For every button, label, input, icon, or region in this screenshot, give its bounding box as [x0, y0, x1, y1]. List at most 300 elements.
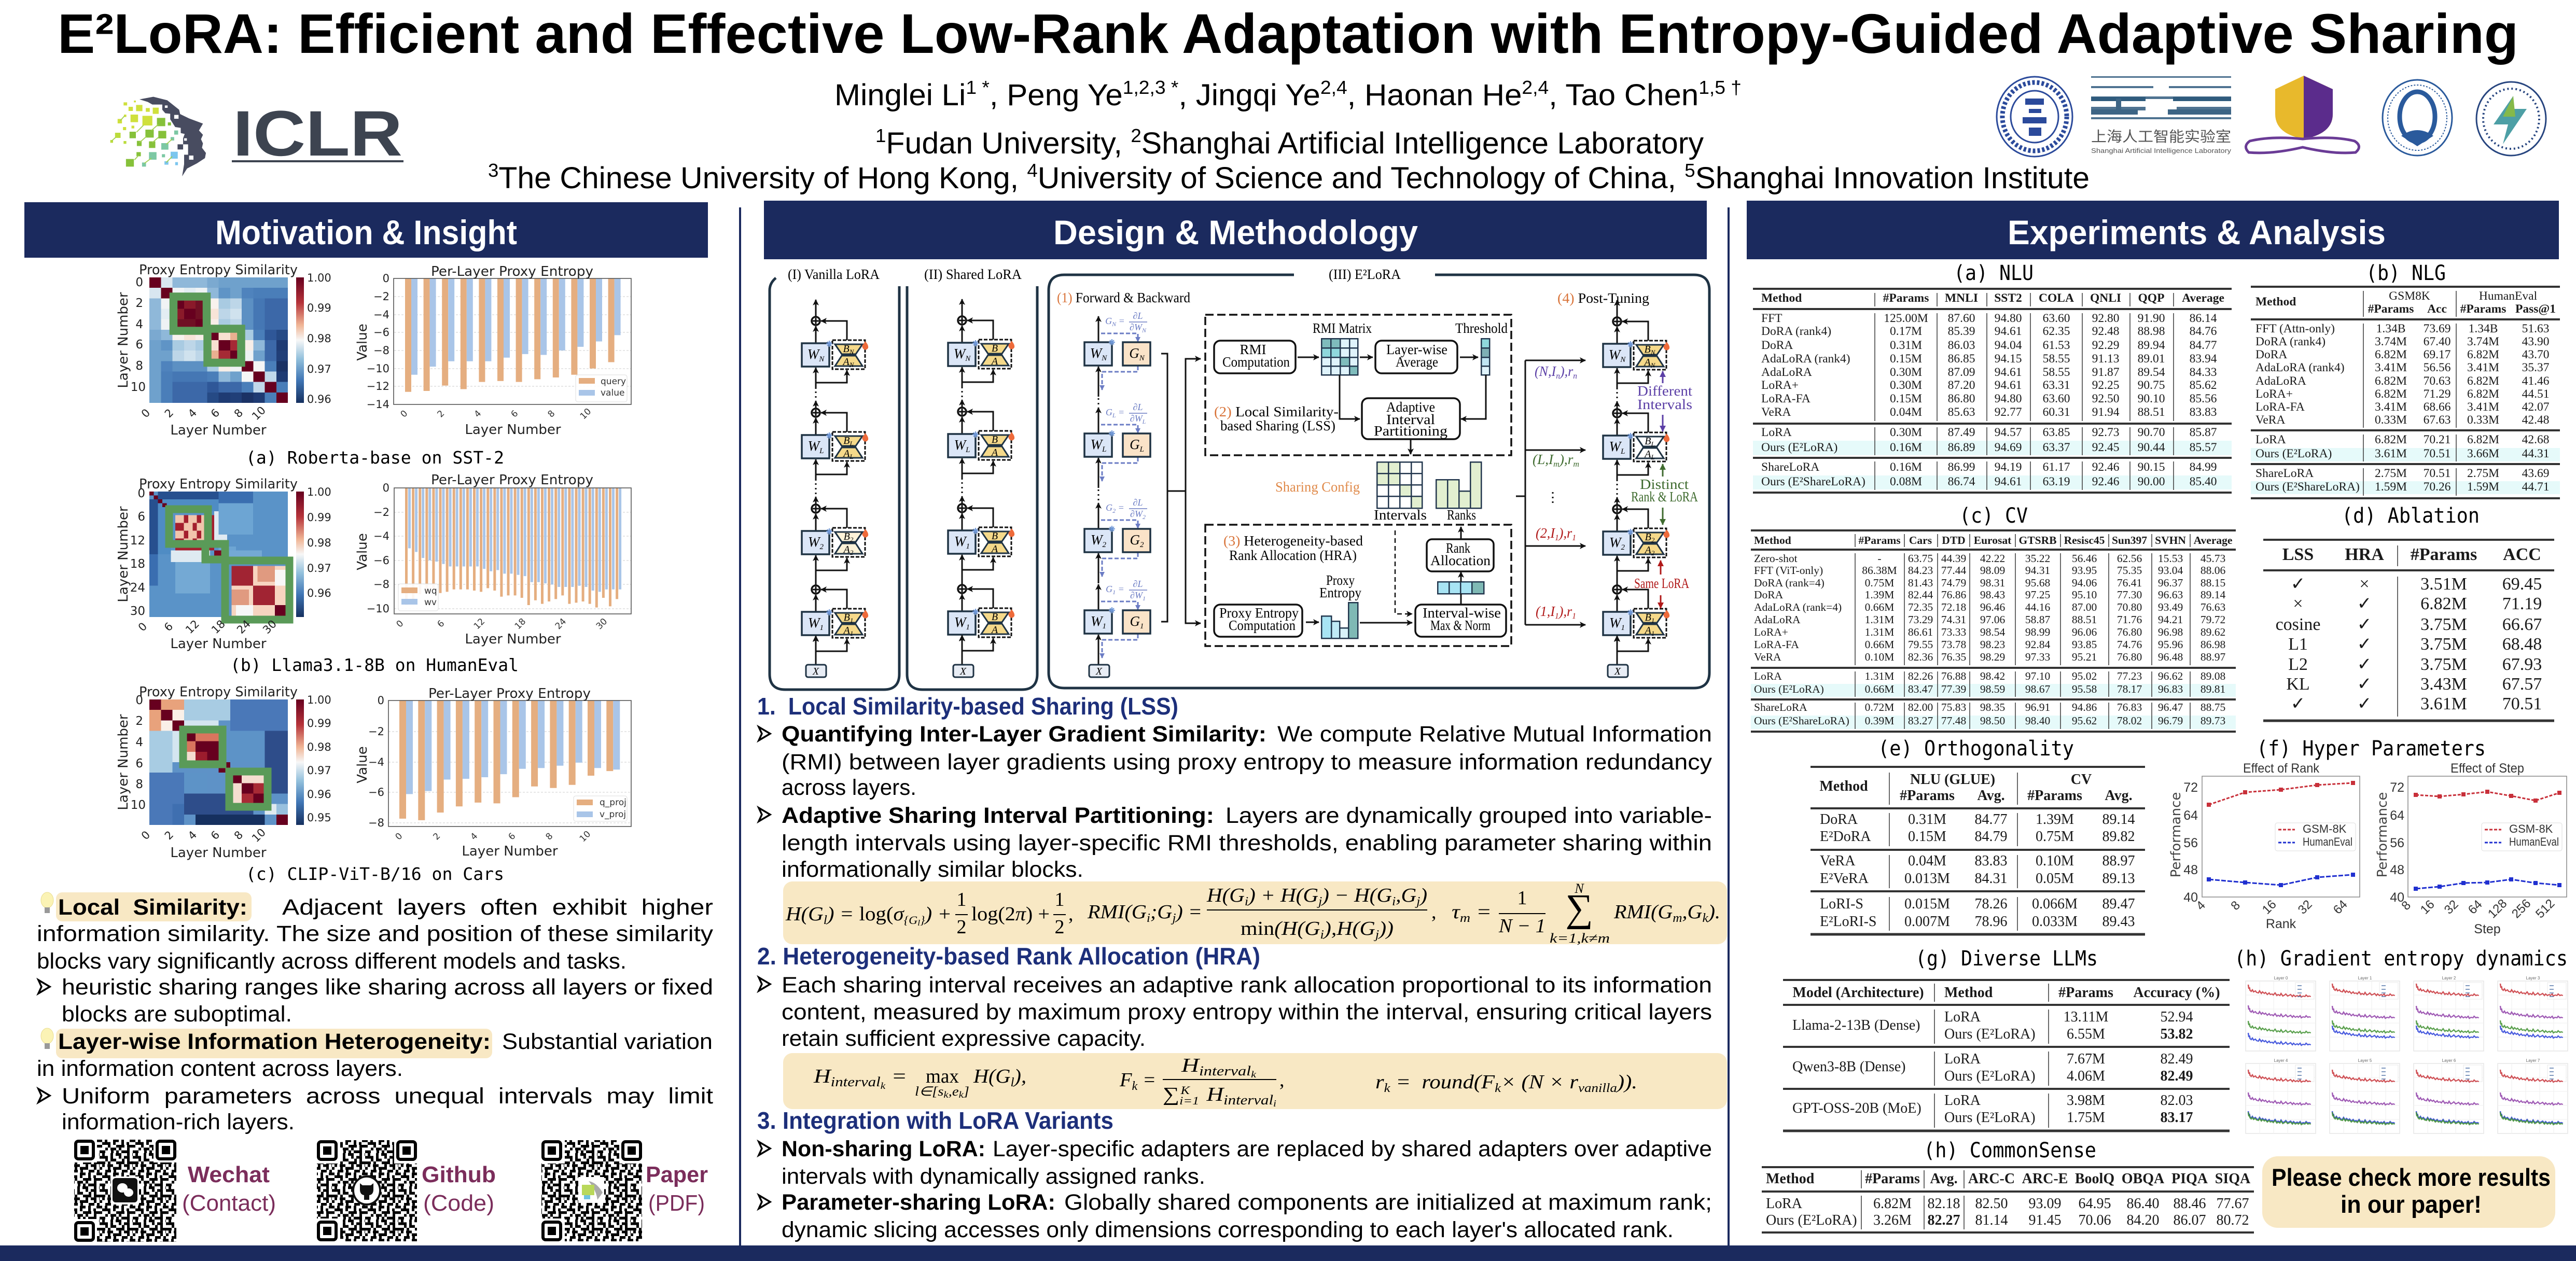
table: CV: 97.10 [2025, 670, 2050, 682]
diagram: Vanilla LoRA: 2 [850, 536, 854, 543]
heading bar: Experiments [1747, 201, 2559, 259]
table: CV: DoRA (rank=4) [1754, 577, 1825, 589]
table: NLU: 58.55 [2043, 366, 2070, 379]
forward and backward column: ∂L [1133, 497, 1143, 508]
table: Ablation: L2 [2288, 655, 2308, 674]
heatmap c labels: 6 [208, 829, 222, 842]
table: Orthogonality: E²LoRI-S [1820, 914, 1876, 930]
formula box: entropy and RMI: ) = [826, 903, 859, 925]
step 4 label: (4) Post-Tuning [1557, 290, 1649, 306]
formula box: rank allocation: l∈[s [915, 1085, 940, 1099]
table: Diverse LLMs: 82.03 [2161, 1092, 2193, 1109]
HRA module: Computation [1229, 618, 1296, 633]
table: NLG: 3.41M [2467, 400, 2499, 414]
small multiples: gradient entropy: Layer 4 [2274, 1058, 2288, 1063]
table: CV: 44.16 [2025, 601, 2050, 613]
table: NLU: 92.46 [2092, 460, 2120, 474]
formula box: entropy and RMI: , [1431, 901, 1437, 923]
table: Diverse LLMs: 82.49 [2161, 1051, 2193, 1067]
text block: LSS bullets: across layers. [782, 775, 916, 800]
table: Ablation: 71.19 [2502, 594, 2542, 613]
bar chart a: query [601, 376, 626, 387]
heatmap c labels: 10 [249, 826, 268, 845]
table: Ablation: ✓ [2357, 655, 2372, 674]
heatmap b labels: Proxy Entropy Similarity [139, 477, 298, 492]
formula box: entropy and RMI: k [1702, 912, 1708, 925]
table: CV: 98.67 [2025, 683, 2050, 695]
text block: LSS bullets: length intervals using layer-specific RMI thresholds, enabling parameter sharing within [782, 831, 1712, 856]
HRA module [1205, 525, 1511, 646]
table: Orthogonality: #Params [2027, 788, 2082, 804]
text block: HRA: Each sharing interval receives an adaptive rank allocation proportional to its information [782, 973, 1712, 998]
config output arrows: m [1553, 460, 1559, 469]
table: CV: 44.39 [1941, 552, 1966, 565]
table: NLU: 86.99 [1948, 460, 1975, 474]
formula box: entropy and RMI: m [1673, 912, 1682, 925]
table: NLU: 90.70 [2138, 426, 2165, 439]
QR label: Github [422, 1162, 496, 1216]
table: NLG: Acc [2427, 302, 2447, 316]
table: NLG: 71.29 [2424, 387, 2450, 401]
table: NLG: 3.61M [2375, 447, 2407, 460]
annotation: distinct rank and LoRA: Rank & LoRA [1631, 489, 1698, 505]
formula box: rank allocation: l [1010, 1076, 1014, 1089]
table: NLG: DoRA (rank4) [2255, 335, 2326, 348]
text block: layer-wise heterogeneity: Uniform parameters across unequal intervals may limit [62, 1084, 713, 1109]
bar chart a: −12 [367, 380, 389, 393]
table: Orthogonality: 78.96 [1975, 914, 2007, 930]
table: NLG: 35.37 [2522, 361, 2550, 374]
formula box: entropy and RMI: )) [1378, 918, 1394, 940]
table: NLG: HumanEval [2479, 289, 2538, 303]
table: NLU: 84.33 [2190, 366, 2217, 379]
config output arrows: (L,I [1533, 452, 1553, 467]
formula box: entropy and RMI: ) + [924, 903, 952, 925]
post-tuning column: 1 [1651, 629, 1654, 637]
table: CommonSense: 82.27 [1927, 1212, 1960, 1228]
table: NLG: 44.51 [2522, 387, 2549, 401]
formula box: rank allocation: = [885, 1066, 907, 1087]
table: CommonSense: 88.46 [2173, 1196, 2206, 1212]
table: CV: 88.51 [2072, 613, 2097, 626]
text block: integration: intervals with dynamically assigned ranks. [782, 1164, 1205, 1189]
heatmap c labels: 2 [135, 714, 143, 728]
formula box: rank allocation: ), [1013, 1066, 1026, 1087]
formula box: rank allocation: H [814, 1066, 828, 1087]
heatmap a labels: 2 [135, 297, 143, 310]
table: CV: 79.72 [2201, 613, 2225, 626]
diagram: Shared LoRA: N [965, 355, 971, 363]
diagram: Vanilla LoRA: W [808, 438, 819, 454]
table: Ablation: ✓ [2357, 635, 2372, 654]
table: CV: 93.04 [2158, 564, 2183, 577]
QR code: Paper [540, 1139, 644, 1243]
chart heading f: (f) Hyper Parameters [2257, 737, 2486, 761]
text block: integration: Non-sharing LoRA: [782, 1137, 985, 1161]
small multiples: gradient entropy: Layer 5 [2358, 1058, 2372, 1063]
table: Ablation: HRA [2345, 545, 2384, 564]
table: Ablation: 68.48 [2502, 635, 2542, 654]
text block: integration: Parameter-sharing LoRA: [782, 1190, 1055, 1215]
text block: layer-wise heterogeneity: Substantial variation [502, 1029, 713, 1054]
table: Ablation: KL [2286, 675, 2310, 694]
formula box: rank allocation: interval [831, 1074, 881, 1089]
heatmap c labels: 4 [135, 736, 143, 749]
table: Orthogonality: 84.77 [1975, 811, 2007, 828]
table: CV: FFT (ViT-only) [1754, 564, 1823, 577]
forward and backward column: 2 [1103, 541, 1107, 549]
diagram: Vanilla LoRA: L [849, 453, 854, 460]
table: NLU [1753, 289, 2232, 493]
post-tuning column: A [1645, 544, 1651, 556]
colorbar c: 0.97 [307, 764, 331, 777]
formula box: rank allocation: k [881, 1081, 886, 1091]
table: NLU: 92.46 [2092, 475, 2120, 488]
config output arrows: n [1573, 372, 1577, 381]
table: Orthogonality: 0.75M [2036, 829, 2074, 845]
table: NLU: Average [2182, 291, 2224, 305]
config output arrows: ),r [1558, 525, 1572, 541]
affiliations line 2: 5 [1684, 160, 1695, 181]
heatmap b labels: 12 [183, 618, 202, 636]
diagram: Shared LoRA: (II) Shared LoRA [924, 267, 1022, 282]
diagram: Shared LoRA: X [959, 666, 967, 677]
forward and backward column: ∂L [1133, 402, 1143, 412]
table: CommonSense: Ours (E²LoRA) [1766, 1212, 1857, 1228]
table: CV [1751, 530, 2236, 732]
bar chart a: 0 [383, 272, 389, 285]
forward and backward column: ∂W [1130, 590, 1143, 600]
QR label: Paper: (PDF) [648, 1190, 705, 1216]
table: Ablation: 3.51M [2420, 575, 2467, 594]
diagram: Shared LoRA: A [991, 624, 998, 636]
table: Ablation: 3.75M [2420, 635, 2467, 654]
table: CV: 0.75M [1865, 577, 1894, 589]
forward and backward column: ∂L [1133, 311, 1143, 321]
diagram: E2LoRA: (III) E²LoRA [1329, 267, 1401, 282]
heatmap a [149, 277, 288, 403]
heatmap c labels: Layer Number [170, 845, 267, 861]
table: NLG: 6.82M [2467, 348, 2499, 361]
table: NLU: 89.54 [2138, 366, 2165, 379]
table: CV: 74.79 [1941, 577, 1966, 589]
table: CV: - [1877, 552, 1882, 565]
table: NLU: 91.87 [2092, 366, 2120, 379]
table: NLG: 44.71 [2522, 480, 2549, 494]
table: NLU: 91.90 [2138, 312, 2165, 325]
line chart: effect of step: 32 [2442, 898, 2461, 917]
colorbar a: 0.99 [307, 302, 331, 314]
bar chart b: 0 [395, 619, 406, 629]
table: NLU: 125.00M [1884, 312, 1928, 325]
colorbar a: 0.97 [307, 363, 331, 375]
diagram: Vanilla LoRA: W [807, 346, 819, 362]
heading bar: Motivation [24, 202, 708, 258]
table: Orthogonality: 0.04M [1908, 853, 1946, 869]
table: NLU: 0.16M [1890, 441, 1922, 454]
heading bar: Design: Design & Methodology [1053, 213, 1418, 251]
table: CV: 96.37 [2158, 577, 2183, 589]
heatmap b labels: 24 [130, 581, 145, 595]
formula box: entropy and RMI: RMI(G [1088, 901, 1144, 923]
forward and backward column: G [1130, 532, 1140, 548]
forward and backward column: 1 [1140, 622, 1144, 630]
heatmap a labels: 8 [232, 407, 245, 420]
annotation: different intervals: Intervals [1637, 397, 1692, 412]
table: NLG: 6.82M [2467, 387, 2499, 401]
table: CV: 96.06 [2072, 626, 2097, 638]
post-tuning column: 2 [1651, 536, 1655, 544]
line chart: effect of rank: GSM-8K [2303, 822, 2347, 835]
post-tuning column: B [1645, 531, 1651, 543]
diagram: Vanilla LoRA: 2 [850, 549, 854, 556]
table: CommonSense: PIQA [2171, 1171, 2208, 1187]
forward and backward column: G [1130, 613, 1140, 629]
table: NLU: QNLI [2090, 291, 2121, 305]
config output arrows: ),r [1558, 604, 1572, 619]
table: CV: 86.98 [2201, 638, 2225, 651]
forward and backward column: G [1130, 437, 1140, 452]
formula box: entropy and RMI: log(2π) + [971, 903, 1050, 925]
table: NLG: Ours (E²ShareLoRA) [2255, 480, 2360, 494]
HRA module: Allocation [1430, 553, 1491, 568]
table: CV: GTSRB [2019, 534, 2056, 547]
table: NLG: DoRA [2255, 348, 2287, 361]
text block: layer-wise heterogeneity: in information content across layers. [37, 1056, 403, 1081]
table: CV: Eurosat [1974, 534, 2012, 547]
heatmap b [149, 492, 289, 620]
diagram: Shared LoRA: L [965, 446, 970, 454]
table: NLG: 3.41M [2375, 400, 2407, 414]
table: CV: 96.47 [2158, 701, 2183, 713]
heatmap a labels: Layer Number [170, 423, 267, 438]
table: NLG: LoRA [2255, 433, 2286, 446]
table: NLG: 2.75M [2375, 467, 2407, 480]
logo: Shanghai Innovation Institute [2476, 82, 2546, 156]
heatmap b labels: 6 [137, 510, 145, 524]
table: NLU: 61.53 [2043, 339, 2070, 352]
forward and backward column: ∂W [1130, 413, 1143, 424]
diagram: Vanilla LoRA: L [849, 440, 854, 447]
table: NLU: LoRA-FA [1761, 392, 1811, 405]
table: CV: DoRA [1754, 589, 1784, 601]
HRA module: (3) Heterogeneity-based [1223, 533, 1363, 549]
table: CV: 0.72M [1865, 701, 1894, 713]
diagram: Vanilla LoRA: A [844, 625, 850, 636]
table: NLU: 94.61 [1995, 325, 2022, 338]
formula box: entropy and RMI: H(G [1207, 885, 1242, 906]
text block: local similarity: information similarity. The size and position of these similarity [37, 921, 714, 946]
table: CommonSense: 84.20 [2126, 1212, 2160, 1228]
table: NLG: 67.63 [2424, 413, 2450, 427]
table: NLG: 68.66 [2424, 400, 2451, 414]
formula box: entropy and RMI: } [920, 914, 925, 927]
authors: , Tao Chen [1549, 78, 1698, 112]
bar chart b: Value [355, 533, 370, 570]
table: NLU: 89.01 [2138, 352, 2165, 366]
table: CV: 93.49 [2158, 601, 2183, 613]
forward and backward column: 1 [1103, 622, 1106, 630]
diagram: Vanilla LoRA: N [849, 361, 855, 369]
bar chart b: −4 [373, 530, 389, 542]
table heading commonsense: (h) CommonSense [1924, 1139, 2096, 1162]
table: Orthogonality: 0.013M [1904, 871, 1950, 887]
colorbar c: 0.98 [307, 741, 331, 753]
logo: USTC [2383, 80, 2452, 156]
colorbar b [296, 486, 331, 617]
table: CommonSense: 77.67 [2217, 1196, 2249, 1212]
heatmap a labels: 8 [135, 359, 143, 373]
line chart: effect of step: Effect of Step [2450, 761, 2524, 776]
table: NLU: 0.16M [1890, 460, 1922, 474]
bar chart c: Layer Number [462, 844, 558, 859]
formula box: rank allocation: × (N × r [1501, 1071, 1578, 1093]
table: CV: LoRA [1754, 670, 1782, 682]
line chart: effect of rank: 64 [2183, 808, 2198, 823]
table: NLG: Ours (E²LoRA) [2255, 447, 2332, 460]
table: NLG: 1.59M [2375, 480, 2407, 494]
table: NLU: 92.25 [2092, 379, 2119, 392]
forward and backward column: ∂L [1133, 579, 1143, 589]
forward and backward column: W [1091, 437, 1102, 452]
formula box: rank allocation: interval [1199, 1063, 1251, 1078]
heatmap b labels: 24 [234, 618, 253, 636]
table: NLU: 0.30M [1890, 426, 1922, 439]
heatmap c labels: Proxy Entropy Similarity [139, 684, 298, 700]
table: CV: AdaLoRA [1754, 613, 1801, 626]
LSS module: Average [1396, 354, 1438, 370]
diagram: Shared LoRA: W [954, 437, 966, 453]
authors: 2,4 [1320, 77, 1347, 98]
bar chart c: Per-Layer Proxy Entropy [428, 686, 591, 702]
caption b: (b) Llama3.1-8B on HumanEval [230, 655, 519, 675]
table: NLU: ShareLoRA [1761, 460, 1819, 474]
table: CV: 73.78 [1941, 638, 1966, 651]
table: CV: 72.35 [1908, 601, 1933, 613]
bar chart a: 0 [399, 409, 410, 419]
table: Ablation: ✓ [2291, 694, 2305, 713]
post-tuning column: W [1609, 347, 1620, 362]
formula box: entropy and RMI: = [1470, 901, 1492, 923]
logo: Shanghai AI Lab: Shanghai Artificial Intelligence Laboratory [2091, 147, 2232, 155]
table: CommonSense: Method [1766, 1171, 1815, 1187]
table: NLU: MNLI [1945, 291, 1978, 305]
heading bar: Experiments: Experiments & Analysis [2008, 213, 2386, 251]
small multiples: gradient entropy: Layer 1 [2358, 976, 2372, 980]
table: Diverse LLMs: 82.49 [2161, 1068, 2193, 1084]
sharing config: Intervals [1374, 507, 1427, 523]
table: CV: 95.21 [2072, 651, 2097, 663]
text block: local similarity: blocks vary significantly across different models and tasks. [37, 949, 626, 974]
colorbar b: 1.00 [307, 486, 331, 498]
bar chart b: 12 [472, 617, 487, 632]
table: CV: 1.39M [1865, 589, 1894, 601]
table: CV: 98.29 [1980, 651, 2005, 663]
bar chart b: −6 [373, 554, 389, 567]
table: NLG: LoRA+ [2255, 387, 2293, 401]
authors: 1,2,3 * [1123, 77, 1178, 98]
post-tuning column: N [1650, 348, 1656, 356]
table: CV: 96.98 [2158, 626, 2183, 638]
table: CV: 83.27 [1908, 714, 1933, 727]
diagram: Shared LoRA [907, 267, 1037, 690]
heatmap a labels: 0 [139, 407, 152, 420]
formula box: entropy and RMI: ) [1419, 885, 1427, 906]
table: NLG: 3.41M [2375, 361, 2407, 374]
table: CV: 98.40 [2025, 714, 2050, 727]
table: CV: Sun397 [2112, 534, 2147, 547]
table heading b: (b) NLG [2366, 261, 2446, 285]
config output arrows: 1 [1572, 534, 1576, 542]
config output arrows [1516, 360, 1585, 625]
diagram: Shared LoRA: 1 [966, 623, 970, 632]
table: CV: 56.46 [2072, 552, 2097, 565]
small multiples: gradient entropy: Layer 2 [2442, 976, 2456, 980]
config output arrows: (2,I [1536, 525, 1555, 541]
LSS module: (2) Local Similarity- [1214, 404, 1339, 419]
text block: layer-wise heterogeneity: Layer-wise Information Heterogeneity: [58, 1029, 491, 1054]
table: NLG: 6.82M [2375, 433, 2407, 446]
table: NLU: 85.63 [1948, 405, 1975, 419]
line chart: effect of rank: 40 [2183, 890, 2198, 905]
table: NLU: 91.94 [2092, 405, 2120, 419]
table: NLU: 94.80 [1995, 312, 2022, 325]
heading: integration: 3. Integration with LoRA Variants [757, 1107, 1113, 1134]
config output arrows: 1 [1555, 534, 1559, 542]
post-tuning column: W [1609, 535, 1621, 550]
HRA module: Rank [1446, 540, 1470, 556]
QR label: Paper: Paper [646, 1162, 708, 1187]
colorbar c: 1.00 [307, 694, 331, 706]
heatmap c labels: 6 [135, 757, 143, 770]
table: NLG: 3.41M [2467, 361, 2499, 374]
table: Diverse LLMs: Method [1944, 985, 1993, 1001]
table: CommonSense: Avg. [1930, 1171, 1958, 1187]
table: CommonSense [1762, 1167, 2254, 1232]
forward and backward column: G [1106, 407, 1112, 417]
table: Orthogonality: DoRA [1820, 811, 1858, 828]
forward and backward column: W [1091, 532, 1103, 548]
table: NLG: 56.56 [2424, 361, 2451, 374]
formula box: entropy and RMI: ;G [1150, 901, 1172, 923]
table: CV: 77.30 [2117, 589, 2142, 601]
table: CV: 96.46 [1980, 601, 2005, 613]
formula box: entropy and RMI: ) = [1175, 901, 1202, 923]
heatmap b labels [116, 477, 298, 652]
table: CV: LoRA-FA [1754, 638, 1799, 651]
table: NLU: 63.37 [2043, 441, 2070, 454]
diagram: Shared LoRA: W [954, 614, 966, 630]
panel: Experiments and Analysis [1747, 201, 2568, 1232]
table: CommonSense: BoolQ [2075, 1171, 2114, 1187]
table: CV: 76.63 [2201, 601, 2225, 613]
text block: LSS bullets: (RMI) between layer gradients using proxy entropy to measure information redundancy [782, 750, 1712, 775]
table: CV: 83.47 [1908, 683, 1933, 695]
heatmap b labels: 0 [137, 487, 145, 500]
heatmap b labels: 18 [209, 618, 228, 636]
table: CV: 96.79 [2158, 714, 2183, 727]
table: NLU: 92.80 [2092, 312, 2119, 325]
table: CV: 94.06 [2072, 577, 2097, 589]
post-tuning column: B [1645, 436, 1651, 447]
table: NLG: 1.59M [2467, 480, 2499, 494]
diagram: Shared LoRA: W [954, 534, 966, 549]
forward and backward column: W [1090, 345, 1102, 361]
table: CV: ShareLoRA [1754, 701, 1807, 713]
table: NLG: 70.51 [2424, 467, 2450, 480]
post-tuning column: 1 [1651, 617, 1654, 624]
QR label: Wechat: Wechat [188, 1162, 270, 1187]
